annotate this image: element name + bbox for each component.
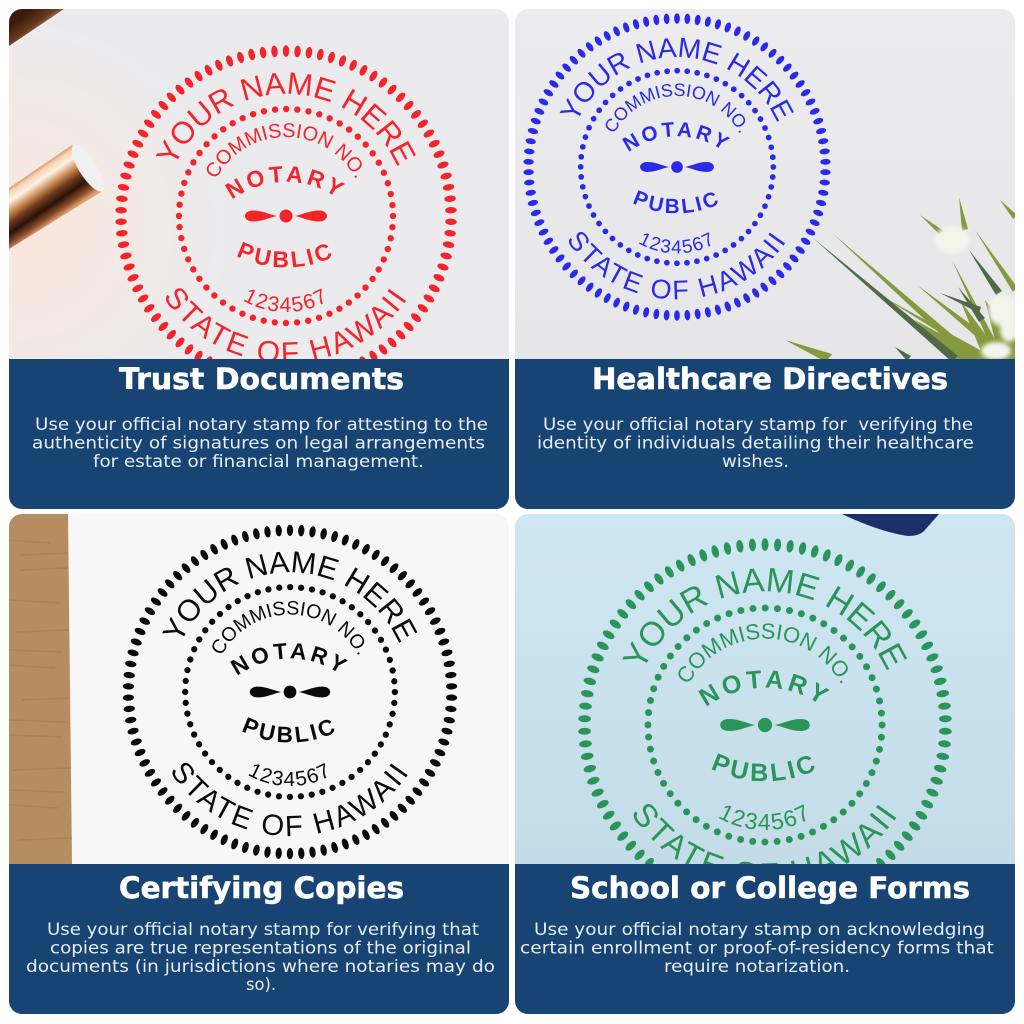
black notary stamp: NOTARY (230, 643, 348, 676)
blue notary stamp: YOUR NAME HERE (560, 38, 794, 122)
red notary stamp: COMMISSION NO. (206, 123, 362, 178)
blue notary stamp: 1234567 (639, 232, 710, 254)
panel: trust documents (9, 9, 509, 509)
red notary stamp: NOTARY (225, 166, 345, 199)
blue notary stamp: COMMISSION NO. (606, 83, 746, 133)
body text: Use your official notary stamp on acknowledging (534, 920, 985, 940)
black notary stamp: COMMISSION NO. (212, 600, 364, 655)
red notary stamp: 1234567 (244, 288, 323, 312)
body text: authenticity of signatures on legal arrangements (32, 434, 485, 454)
red notary stamp: PUBLIC (237, 242, 332, 268)
body text (520, 920, 994, 977)
black notary stamp (122, 524, 458, 860)
body text: for estate or financial management. (93, 452, 424, 472)
photo background: paper (9, 514, 509, 864)
copper pen body (9, 145, 101, 249)
red notary stamp: YOUR NAME HERE (156, 72, 416, 166)
red notary stamp: STATE OF HAWAII (166, 288, 406, 359)
green notary stamp: 1234567 (719, 804, 806, 830)
body text: certain enrollment or proof-of-residency forms that (520, 938, 994, 958)
heading: Healthcare Directives (592, 362, 948, 396)
caption band (9, 864, 509, 1014)
plant leaves and flowers (785, 197, 1018, 362)
blue notary stamp: STATE OF HAWAII (569, 232, 785, 300)
panel: healthcare directives (515, 9, 1015, 509)
black notary stamp: PUBLIC (242, 717, 334, 742)
body text: wishes. (722, 452, 789, 472)
copper pen top (9, 9, 64, 46)
photo background: paper (9, 9, 509, 359)
photo background: paper (515, 514, 1015, 864)
body text: Use your official notary stamp for verifying the (543, 415, 973, 435)
body text: copies are true representations of the original (50, 938, 471, 958)
heading: School or College Forms (570, 871, 970, 905)
caption band (515, 359, 1015, 509)
body text (26, 920, 495, 995)
blue notary stamp (523, 13, 831, 321)
green notary stamp: YOUR NAME HERE (622, 568, 908, 670)
black notary stamp: YOUR NAME HERE (162, 551, 418, 643)
body text: Use your official notary stamp for attesting to the (35, 415, 488, 435)
green notary stamp: NOTARY (698, 670, 830, 706)
blue notary stamp: PUBLIC (633, 190, 718, 214)
body text: Use your official notary stamp for verifying that (47, 920, 479, 940)
caption band (515, 864, 1015, 1014)
body text: so). (246, 975, 276, 995)
red notary stamp (115, 45, 457, 359)
green notary stamp (578, 538, 952, 864)
body text (32, 415, 488, 472)
green notary stamp: COMMISSION NO. (678, 623, 848, 684)
black notary stamp: STATE OF HAWAII (172, 762, 408, 836)
panel: certifying copies (9, 514, 509, 1014)
navy object at top (842, 514, 939, 536)
heading: Certifying Copies (119, 871, 404, 905)
blue notary stamp: NOTARY (622, 122, 730, 152)
body text (538, 417, 973, 467)
green notary stamp: STATE OF HAWAII (634, 804, 896, 864)
green notary stamp: PUBLIC (712, 753, 814, 782)
body text: documents (in jurisdictions where notaries may do (26, 957, 495, 977)
body text: identity of individuals detailing their healthcare (537, 434, 974, 454)
black notary stamp: 1234567 (248, 763, 326, 786)
heading: Trust Documents (119, 362, 404, 396)
copper pen end cap (72, 145, 104, 192)
wood surface (9, 514, 72, 864)
panel: school or college forms (515, 514, 1015, 1014)
caption band (9, 359, 509, 509)
photo background: paper (515, 9, 1015, 359)
body text: require notarization. (664, 957, 850, 977)
